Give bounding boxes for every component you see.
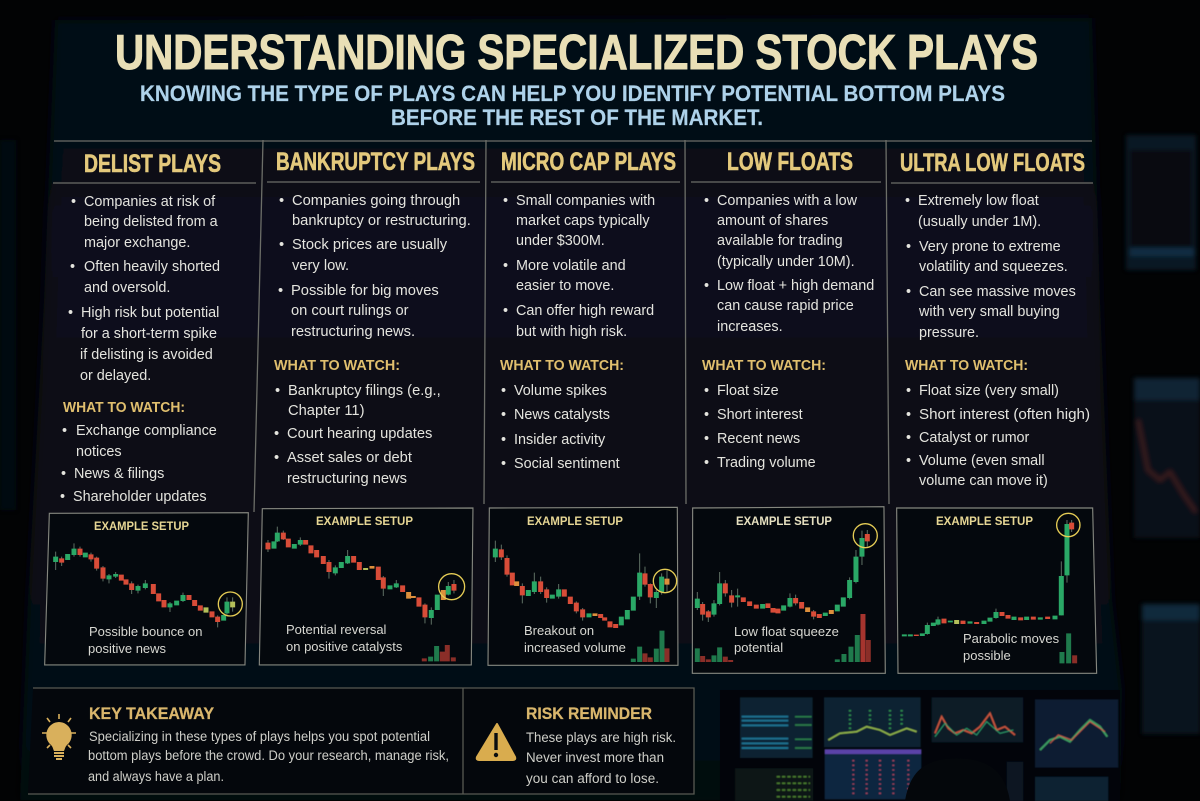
description bullets: market caps typically bbox=[516, 213, 650, 229]
description bullets: • bbox=[278, 283, 283, 299]
description bullets: increases. bbox=[717, 319, 783, 335]
description bullets: • bbox=[503, 303, 508, 319]
description bullets: bankruptcy or restructuring. bbox=[292, 213, 471, 229]
example chart: low floats bbox=[692, 507, 885, 673]
description bullets: • bbox=[704, 193, 709, 209]
what to watch list: Float size bbox=[717, 383, 779, 399]
description bullets: Companies at risk of bbox=[84, 194, 216, 210]
what to watch list: Shareholder updates bbox=[73, 489, 207, 505]
chart label: EXAMPLE SETUP bbox=[527, 514, 623, 528]
chart caption: Low float squeeze bbox=[734, 624, 839, 639]
description bullets: • bbox=[704, 278, 709, 294]
description bullets: under $300M. bbox=[516, 233, 605, 249]
key takeaway text: Specializing in these types of plays helps you spot potential bbox=[89, 729, 430, 744]
chart caption: possible bbox=[963, 648, 1011, 663]
description bullets: or delayed. bbox=[80, 368, 151, 384]
what to watch list: Asset sales or debt bbox=[287, 450, 412, 466]
description bullets: being delisted from a bbox=[84, 214, 218, 230]
description bullets: • bbox=[279, 193, 284, 209]
side monitors background bbox=[0, 135, 1200, 734]
description bullets: available for trading bbox=[717, 233, 843, 249]
description bullets: Companies with a low bbox=[717, 193, 858, 209]
what to watch list: Insider activity bbox=[514, 432, 606, 448]
panel: bottom callouts bbox=[28, 688, 694, 794]
what to watch list: News & filings bbox=[74, 466, 164, 482]
description bullets: • bbox=[906, 239, 911, 255]
description bullets: with very small buying bbox=[918, 304, 1060, 320]
description bullets: (typically under 10M). bbox=[717, 254, 855, 270]
what to watch list: News catalysts bbox=[514, 407, 610, 423]
key takeaway heading: KEY TAKEAWAY bbox=[89, 704, 215, 723]
description bullets: Can see massive moves bbox=[919, 284, 1076, 300]
chart caption: increased volume bbox=[524, 640, 626, 655]
key takeaway text: and always have a plan. bbox=[88, 769, 224, 784]
description bullets: if delisting is avoided bbox=[80, 347, 213, 363]
chart caption: Parabolic moves bbox=[963, 631, 1060, 646]
example chart: ultra low floats bbox=[897, 508, 1097, 673]
description bullets: and oversold. bbox=[84, 280, 170, 296]
what to watch list: Trading volume bbox=[717, 455, 816, 471]
what to watch list: Exchange compliance bbox=[76, 423, 217, 439]
candlesticks bbox=[495, 541, 677, 662]
description bullets: Possible for big moves bbox=[291, 283, 439, 299]
icon: warning triangle bbox=[477, 724, 515, 760]
what to watch list: Court hearing updates bbox=[287, 426, 432, 442]
chart caption: potential bbox=[734, 640, 783, 655]
risk reminder heading: RISK REMINDER bbox=[526, 704, 652, 723]
description bullets: Very prone to extreme bbox=[919, 239, 1061, 255]
chart caption: positive news bbox=[88, 641, 167, 656]
candlesticks bbox=[268, 527, 465, 661]
description bullets: Small companies with bbox=[516, 193, 655, 209]
example chart: micro cap plays bbox=[488, 507, 678, 665]
risk reminder text: you can afford to lose. bbox=[526, 771, 659, 786]
description bullets: major exchange. bbox=[84, 235, 190, 251]
description bullets: High risk but potential bbox=[81, 305, 219, 321]
description bullets: very low. bbox=[292, 258, 349, 274]
description bullets: but with high risk. bbox=[516, 324, 627, 340]
description bullets: More volatile and bbox=[516, 258, 626, 274]
panel: delist plays bbox=[45, 150, 248, 665]
panel: bankruptcy plays bbox=[259, 148, 475, 665]
what to watch heading: WHAT TO WATCH: bbox=[63, 400, 185, 416]
heading: bankruptcy plays: BANKRUPTCY PLAYS bbox=[276, 148, 475, 176]
description bullets: • bbox=[71, 194, 76, 210]
heading: micro cap plays: MICRO CAP PLAYS bbox=[501, 148, 676, 176]
what to watch heading: WHAT TO WATCH: bbox=[500, 358, 624, 374]
what to watch list: Volume spikes bbox=[514, 383, 607, 399]
description bullets: volatility and squeezes. bbox=[919, 259, 1068, 275]
what to watch list: • bbox=[274, 450, 279, 466]
description bullets: Often heavily shorted bbox=[84, 259, 220, 275]
chart label: EXAMPLE SETUP bbox=[736, 514, 832, 528]
what to watch list: Chapter 11) bbox=[288, 403, 364, 419]
heading: ultra low floats: ULTRA LOW FLOATS bbox=[900, 149, 1085, 177]
what to watch list: Float size (very small) bbox=[919, 383, 1059, 399]
description bullets: • bbox=[503, 258, 508, 274]
candlesticks bbox=[56, 543, 242, 627]
key takeaway text: bottom plays before the crowd. Do your research, manage risk, bbox=[88, 748, 449, 763]
risk reminder text bbox=[526, 730, 676, 786]
what to watch list: Volume (even small bbox=[919, 453, 1045, 469]
subtitle: KNOWING THE TYPE OF PLAYS CAN HELP YOU IDENTIFY POTENTIAL BOTTOM PLAYS bbox=[140, 81, 1005, 106]
description bullets: easier to move. bbox=[516, 278, 614, 294]
what to watch list: • bbox=[501, 383, 506, 399]
what to watch list: Short interest bbox=[717, 407, 803, 423]
key takeaway text bbox=[88, 729, 449, 784]
description bullets: Extremely low float bbox=[918, 193, 1039, 209]
description bullets: • bbox=[905, 193, 910, 209]
chart label: EXAMPLE SETUP bbox=[316, 514, 413, 528]
chart label: EXAMPLE SETUP bbox=[94, 519, 189, 533]
heading: delist plays: DELIST PLAYS bbox=[84, 150, 221, 178]
description bullets: restructuring news. bbox=[291, 324, 415, 340]
description bullets: • bbox=[503, 193, 508, 209]
what to watch list: Catalyst or rumor bbox=[919, 430, 1030, 446]
panel: ultra low floats bbox=[897, 149, 1097, 673]
what to watch list: • bbox=[61, 466, 66, 482]
description bullets: • bbox=[70, 259, 75, 275]
example chart: bankruptcy plays bbox=[259, 508, 473, 665]
icon: light bulb bbox=[42, 714, 76, 759]
description bullets: amount of shares bbox=[717, 213, 828, 229]
description bullets: (usually under 1M). bbox=[918, 214, 1041, 230]
what to watch list: Recent news bbox=[717, 431, 800, 447]
candlesticks bbox=[697, 524, 877, 662]
what to watch list: Bankruptcy filings (e.g., bbox=[288, 383, 441, 399]
what to watch list: • bbox=[906, 383, 911, 399]
subtitle: BEFORE THE REST OF THE MARKET. bbox=[391, 105, 763, 130]
description bullets: • bbox=[906, 284, 911, 300]
description bullets: • bbox=[68, 305, 73, 321]
chart caption: Potential reversal bbox=[286, 622, 387, 637]
description bullets: can cause rapid price bbox=[717, 298, 854, 314]
description bullets: for a short-term spike bbox=[81, 326, 217, 342]
example chart: delist plays bbox=[45, 513, 248, 665]
what to watch list: • bbox=[704, 455, 709, 471]
chart caption: Possible bounce on bbox=[89, 624, 202, 639]
what to watch list: • bbox=[906, 407, 911, 423]
candlesticks bbox=[904, 513, 1080, 663]
what to watch list: volume can move it) bbox=[919, 473, 1048, 489]
description bullets: Stock prices are usually bbox=[292, 237, 448, 253]
what to watch list: • bbox=[62, 423, 67, 439]
description bullets: on court rulings or bbox=[291, 303, 409, 319]
what to watch list: Social sentiment bbox=[514, 456, 620, 472]
heading: low floats: LOW FLOATS bbox=[727, 148, 853, 176]
what to watch list: • bbox=[274, 426, 279, 442]
panel: micro cap plays bbox=[488, 148, 678, 665]
what to watch list: • bbox=[275, 383, 280, 399]
chart label: EXAMPLE SETUP bbox=[936, 514, 1033, 528]
trading monitors bbox=[720, 690, 1120, 801]
what to watch list: • bbox=[501, 432, 506, 448]
what to watch list: • bbox=[501, 407, 506, 423]
what to watch list: • bbox=[704, 383, 709, 399]
what to watch list: • bbox=[704, 431, 709, 447]
what to watch list: • bbox=[60, 489, 65, 505]
what to watch list: notices bbox=[76, 444, 122, 460]
what to watch list: • bbox=[501, 456, 506, 472]
what to watch list: • bbox=[906, 430, 911, 446]
what to watch heading: WHAT TO WATCH: bbox=[274, 358, 400, 374]
description bullets: pressure. bbox=[919, 325, 979, 341]
what to watch list: • bbox=[906, 453, 911, 469]
what to watch heading: WHAT TO WATCH: bbox=[905, 358, 1028, 374]
what to watch list: Short interest (often high) bbox=[919, 407, 1090, 423]
chart caption: Breakout on bbox=[524, 623, 594, 638]
description bullets: Companies going through bbox=[292, 193, 460, 209]
description bullets: Can offer high reward bbox=[516, 303, 654, 319]
subtitle bbox=[140, 81, 1005, 130]
risk reminder text: These plays are high risk. bbox=[526, 730, 676, 745]
panel: low floats bbox=[692, 148, 885, 673]
what to watch heading: WHAT TO WATCH: bbox=[702, 358, 826, 374]
risk reminder text: Never invest more than bbox=[526, 750, 664, 765]
what to watch list: • bbox=[704, 407, 709, 423]
description bullets: • bbox=[279, 237, 284, 253]
what to watch list: restructuring news bbox=[287, 471, 407, 487]
chart caption: on positive catalysts bbox=[286, 639, 403, 654]
description bullets: Low float + high demand bbox=[717, 278, 874, 294]
